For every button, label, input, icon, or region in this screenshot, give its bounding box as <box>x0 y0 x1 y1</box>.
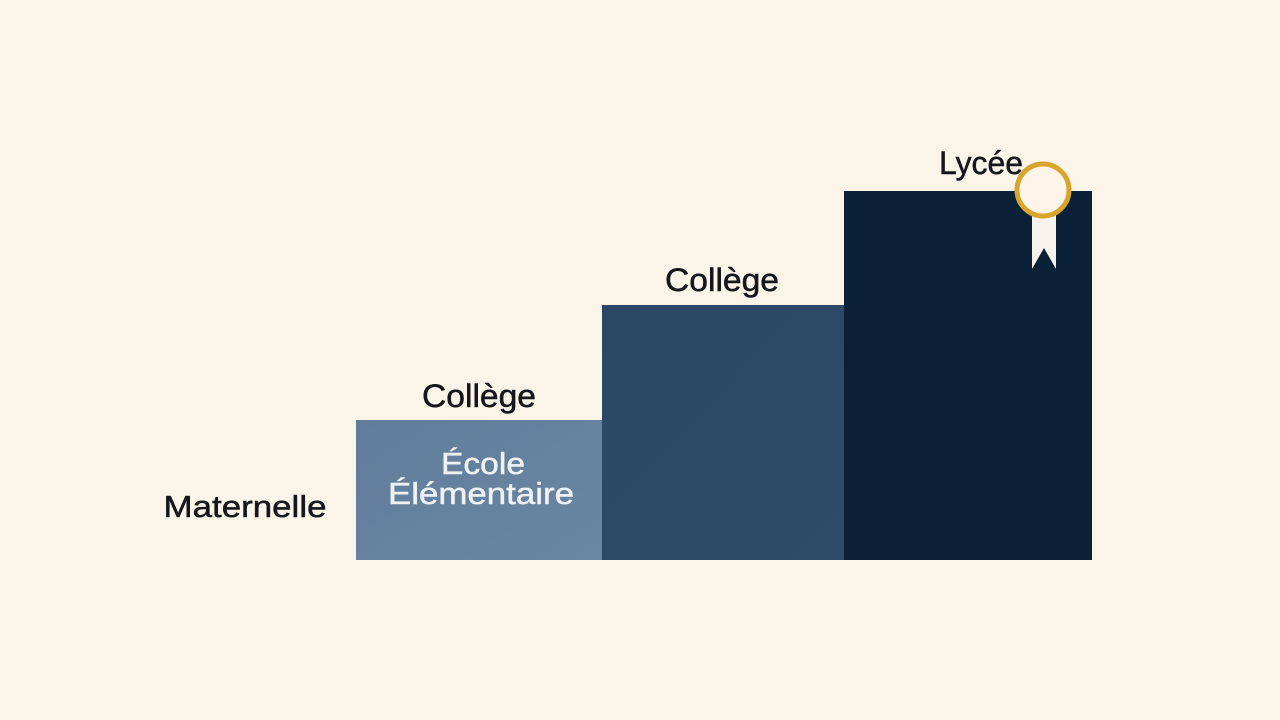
label: Maternelle: Maternelle <box>164 489 326 524</box>
step 3 bar <box>844 191 1092 560</box>
staircase chart <box>356 191 1092 560</box>
label: Collège step 1: Collège <box>422 378 536 414</box>
icon: medal with ribbon <box>1017 164 1069 269</box>
step 2 bar <box>602 305 844 560</box>
label: Collège step 2: Collège <box>665 262 779 298</box>
label: Lycée: Lycée <box>939 145 1023 181</box>
step 1 label line 2: Élémentaire <box>388 476 574 511</box>
step 1 bar: École Élémentaire <box>356 420 602 560</box>
step 1 label: École <box>441 446 525 481</box>
